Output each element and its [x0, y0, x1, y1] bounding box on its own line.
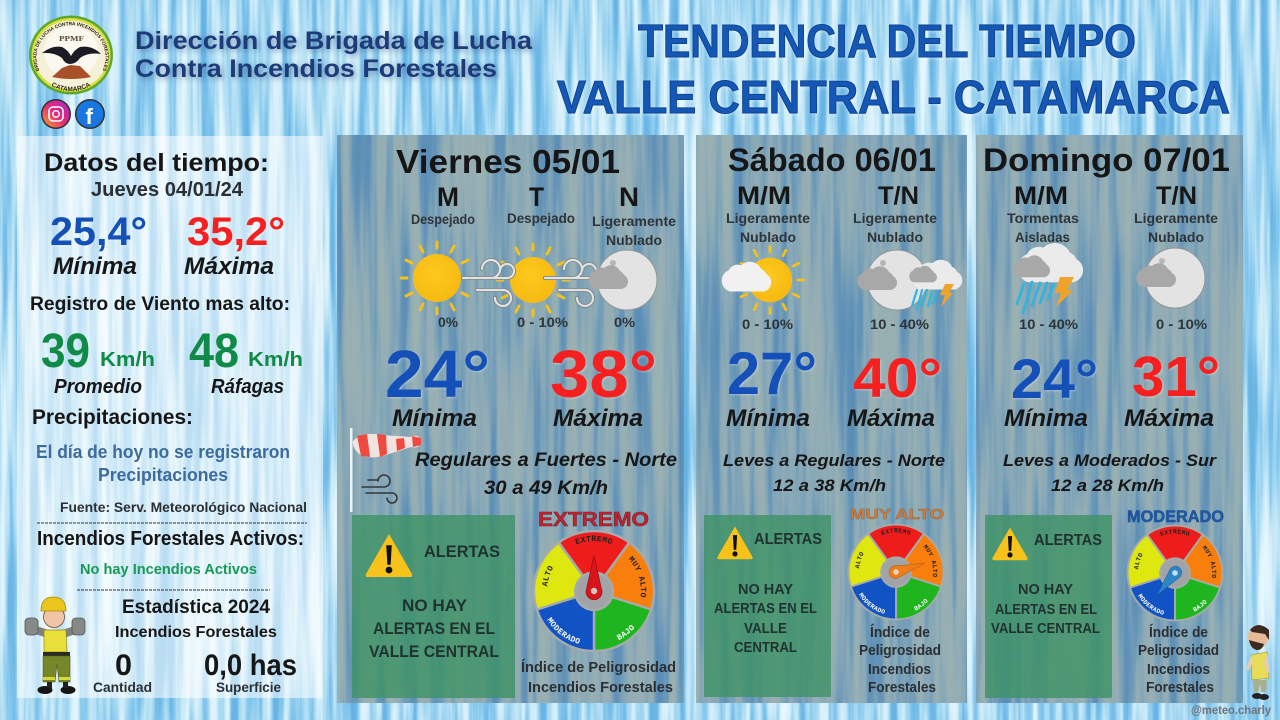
icon: moon with storm — [857, 250, 962, 310]
header: dirección de brigada: Dirección de Brigada de Lucha — [135, 27, 533, 55]
heading: precipitaciones: Precipitaciones: — [32, 406, 193, 429]
title: TENDENCIA DEL TIEMPO — [638, 15, 1136, 67]
gauge caption: Incendios — [868, 662, 931, 678]
header: dirección de brigada — [135, 27, 533, 83]
label minima: Mínima — [53, 253, 137, 280]
gauge: muy alto: MUY ALTO — [923, 544, 938, 577]
gauge caption: Forestales — [868, 680, 936, 696]
header: dirección de brigada: Contra Incendios Forestales — [135, 55, 497, 83]
period: M/M: M/M — [737, 182, 791, 210]
date: Jueves 04/01/24 — [91, 179, 244, 201]
period: M/M: M/M — [1014, 182, 1068, 210]
label maxima: Máxima — [1124, 405, 1214, 432]
panel: alertas sabado — [704, 515, 831, 697]
gauge: muy alto — [848, 524, 944, 620]
gauge: moderado: BAJO — [1192, 600, 1206, 612]
rain chance morning: 0% — [438, 314, 459, 330]
wind gusts — [189, 325, 303, 378]
heading: sabado: Sábado 06/01 — [728, 142, 936, 178]
gauge caption: Peligrosidad — [1138, 643, 1219, 659]
rain chance afternoon: 0 - 10% — [517, 314, 569, 330]
icon: warning triangle — [717, 527, 753, 559]
wind description — [415, 450, 677, 499]
panel: alertas domingo — [985, 515, 1112, 698]
gauge caption: Índice de Peligrosidad — [521, 659, 676, 676]
title: VALLE CENTRAL - CATAMARCA — [557, 71, 1230, 123]
fire status: No hay Incendios Activos — [80, 561, 257, 578]
icon: author avatar — [1246, 625, 1270, 700]
alert text — [714, 582, 817, 656]
icon: facebook: f — [86, 104, 94, 129]
gauge: extremo: MODERADO — [547, 617, 580, 644]
rain chance night: 0 - 10% — [1156, 316, 1208, 332]
heading: datos del tiempo: Datos del tiempo: — [44, 149, 269, 177]
gauge caption: Índice de — [1149, 624, 1208, 641]
heading: registro de viento: Registro de Viento mas alto: — [30, 294, 290, 315]
icon: sun behind cloud — [722, 247, 803, 313]
period: M: M — [437, 182, 459, 212]
subheading: incendios forestales: Incendios Forestales — [115, 624, 277, 641]
temperature minimum: 25,4° — [50, 210, 147, 254]
icon: storm — [1014, 243, 1083, 313]
alert text: VALLE CENTRAL — [369, 642, 499, 661]
condition night: Nublado — [867, 229, 923, 245]
rain chance night: 10 - 40% — [870, 316, 930, 332]
danger level: muy alto: MUY ALTO — [850, 506, 944, 523]
stat: cantidad: 0 — [115, 649, 132, 682]
wind description: 30 a 49 Km/h — [484, 478, 608, 499]
heading: viernes: Viernes 05/01 — [396, 143, 620, 180]
condition morning: Aisladas — [1015, 229, 1070, 245]
condition morning: Tormentas — [1007, 210, 1079, 226]
icon: sun with wind afternoon — [463, 244, 569, 316]
gauge: muy alto: BAJO — [914, 599, 928, 611]
label maxima: Máxima — [184, 253, 274, 280]
icon: windsock — [350, 428, 421, 512]
forecast maximum: 38° — [550, 337, 657, 412]
icon: moon with cloud and wind night — [545, 250, 657, 310]
precipitation note: Precipitaciones — [98, 465, 228, 485]
gauge: extremo: BAJO — [616, 625, 634, 640]
gauge: moderado — [1126, 524, 1224, 622]
precipitation note: El día de hoy no se registraron — [36, 442, 290, 462]
gauge caption: Incendios — [1147, 662, 1210, 678]
wind average: 39 — [41, 325, 90, 378]
condition night: Nublado — [606, 232, 662, 248]
period: T: T — [529, 182, 544, 212]
forecast minimum: 27° — [727, 340, 817, 407]
label minima: Mínima — [392, 405, 477, 432]
gauge caption: Peligrosidad — [859, 643, 941, 659]
title — [557, 15, 1230, 123]
danger level: extremo: EXTREMO — [538, 509, 649, 531]
wind description: Regulares a Fuertes - Norte — [415, 450, 677, 471]
gauge: moderado: MUY ALTO — [1202, 545, 1216, 578]
stat: cantidad — [93, 649, 152, 695]
condition morning — [1007, 210, 1079, 245]
source: Fuente: Serv. Meteorológico Nacional — [60, 499, 307, 515]
rain chance morning: 10 - 40% — [1019, 316, 1079, 332]
condition night: Nublado — [1148, 229, 1204, 245]
gauge: extremo — [532, 530, 656, 652]
label minima: Mínima — [726, 405, 810, 432]
wind description: 12 a 38 Km/h — [773, 476, 886, 495]
icon: sun morning — [401, 242, 473, 314]
alert text: ALERTAS EN EL — [373, 619, 495, 638]
alert text: NO HAY — [402, 596, 468, 615]
condition morning: Despejado — [411, 212, 475, 227]
alert text: ALERTAS EN EL — [714, 601, 817, 617]
logo: brigada badge — [29, 16, 113, 94]
label minima: Mínima — [1004, 405, 1088, 432]
alert text: VALLE CENTRAL — [991, 621, 1100, 637]
rain chance morning: 0 - 10% — [742, 316, 794, 332]
stat: superficie: 0,0 has — [204, 649, 297, 682]
condition night: Ligeramente — [592, 213, 676, 229]
wind average — [41, 325, 155, 378]
icon: firefighter — [25, 597, 85, 694]
logo: brigada badge: BRIGADA DE LUCHA CONTRA INCENDIOS FORESTALES — [33, 22, 109, 72]
condition night: Ligeramente — [1134, 210, 1218, 226]
condition morning: Nublado — [740, 229, 796, 245]
period: T/N: T/N — [878, 182, 919, 210]
icon: instagram — [41, 99, 71, 129]
alert heading: ALERTAS — [1034, 532, 1102, 549]
panel: sabado 06/01 — [696, 135, 967, 703]
label rafagas: Ráfagas — [211, 376, 284, 398]
gauge: moderado: MODERADO — [1138, 594, 1164, 614]
danger level: moderado: MODERADO — [1127, 507, 1224, 526]
wind description — [723, 451, 945, 495]
wind description: Leves a Moderados - Sur — [1003, 451, 1217, 470]
wind gusts: Km/h — [248, 349, 303, 371]
condition night — [1134, 210, 1218, 245]
condition afternoon: Despejado — [507, 211, 575, 226]
gauge: muy alto: EXTREMO — [881, 528, 910, 535]
panel: domingo 07/01 — [976, 135, 1243, 703]
gauge: muy alto: MODERADO — [859, 592, 885, 614]
icon: facebook — [75, 99, 105, 129]
alert text: CENTRAL — [734, 640, 797, 656]
wind average: Km/h — [100, 349, 155, 371]
heading: domingo: Domingo 07/01 — [983, 142, 1230, 178]
alert text: NO HAY — [1018, 582, 1073, 598]
label maxima: Máxima — [553, 405, 643, 432]
gauge: moderado: ALTO — [1134, 553, 1142, 570]
gauge: muy alto: ALTO — [855, 552, 864, 569]
credit: @meteo.charly — [1191, 703, 1271, 717]
wind description: Leves a Regulares - Norte — [723, 451, 945, 470]
icon: wind lines — [362, 475, 397, 503]
alert text — [369, 596, 499, 661]
temperature maximum: 35,2° — [187, 210, 285, 254]
condition morning: Ligeramente — [726, 210, 810, 226]
gauge caption — [521, 659, 676, 696]
condition night — [592, 213, 676, 248]
gauge: extremo: EXTREMO — [575, 536, 612, 544]
condition morning — [726, 210, 810, 245]
label promedio: Promedio — [54, 376, 142, 398]
panel: viernes 05/01 — [337, 135, 684, 703]
alert text — [991, 582, 1100, 637]
wind description: 12 a 28 Km/h — [1051, 476, 1164, 495]
condition night — [853, 210, 937, 245]
forecast maximum: 40° — [853, 346, 942, 409]
gauge: extremo: ALTO — [542, 566, 553, 587]
stat: superficie: Superficie — [216, 679, 281, 695]
gauge caption — [859, 624, 941, 696]
icon: warning triangle — [992, 528, 1028, 560]
alert heading: ALERTAS — [754, 531, 822, 548]
period: T/N: T/N — [1156, 182, 1197, 210]
period: N: N — [619, 182, 639, 212]
logo: brigada badge: PPMF — [59, 35, 84, 43]
alert text: ALERTAS EN EL — [995, 602, 1097, 618]
gauge caption: Incendios Forestales — [528, 679, 673, 696]
precipitation note — [36, 442, 290, 485]
logo: brigada badge: CATAMARCA — [52, 82, 91, 92]
condition night: Ligeramente — [853, 210, 937, 226]
stat: cantidad: Cantidad — [93, 679, 152, 695]
icon: moon with cloud — [1136, 248, 1205, 308]
alert heading: ALERTAS — [424, 542, 500, 561]
stat: superficie — [204, 649, 297, 695]
icon: warning triangle — [366, 534, 412, 577]
panel: alertas viernes — [352, 515, 515, 698]
wind gusts: 48 — [189, 325, 239, 378]
gauge: moderado: EXTREMO — [1160, 529, 1190, 536]
alert text: VALLE — [744, 621, 787, 637]
gauge caption: Forestales — [1146, 680, 1214, 696]
heading: estadistica: Estadística 2024 — [122, 597, 270, 618]
label maxima: Máxima — [847, 405, 935, 432]
heading: incendios activos: Incendios Forestales Activos: — [37, 528, 304, 550]
alert text: NO HAY — [738, 582, 793, 598]
forecast minimum: 24° — [385, 337, 490, 412]
gauge caption: Índice de — [870, 624, 930, 641]
gauge caption — [1138, 624, 1219, 696]
forecast maximum: 31° — [1132, 345, 1220, 409]
rain chance night: 0% — [614, 314, 636, 330]
panel: datos del tiempo — [17, 136, 323, 698]
gauge: extremo: MUY ALTO — [628, 556, 646, 598]
forecast minimum: 24° — [1011, 347, 1098, 410]
wind description — [1003, 451, 1217, 495]
